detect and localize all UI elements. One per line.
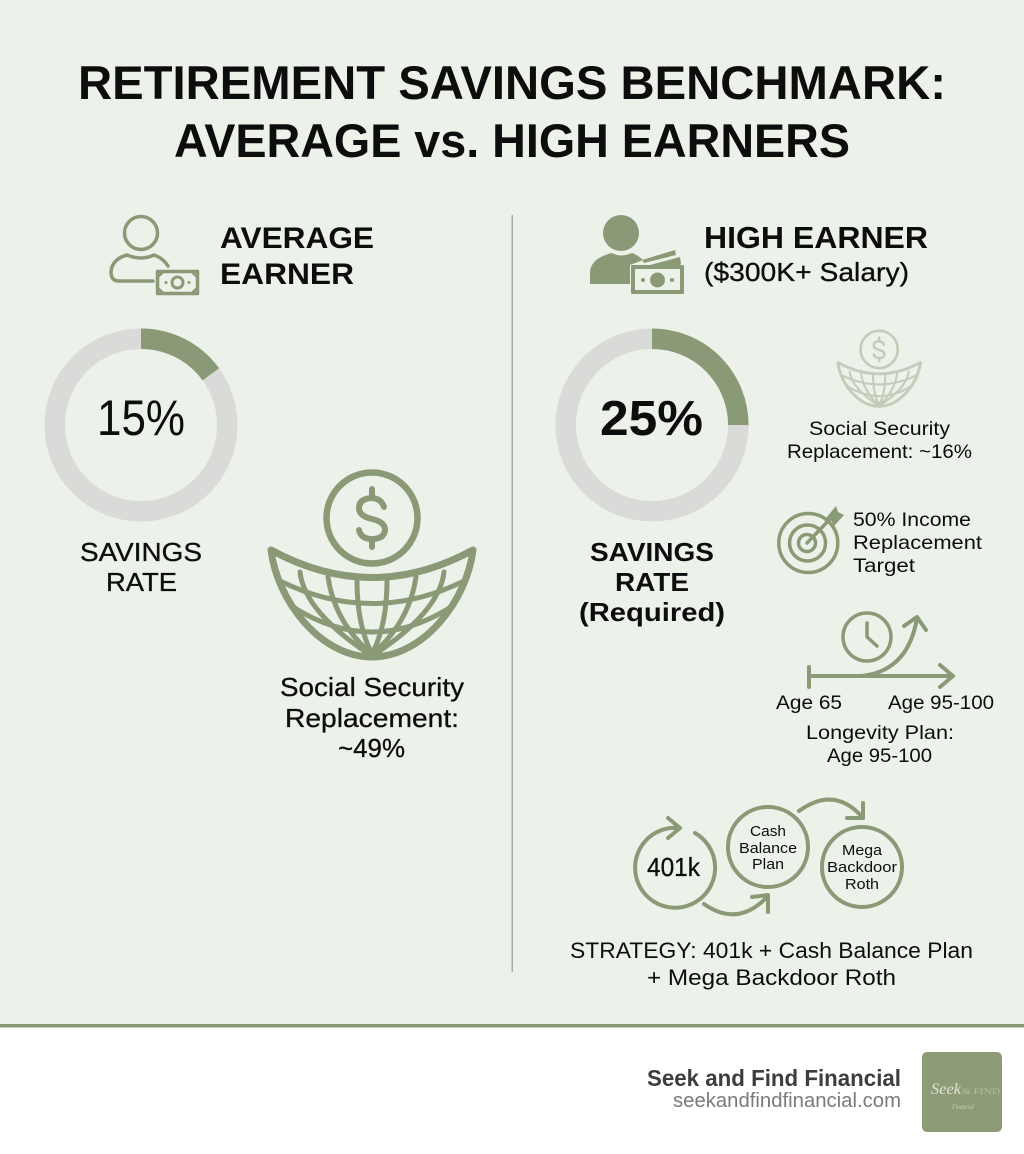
label: savings rate required: (Required) [579,597,725,627]
donut chart: 25% savings rate: 25% [600,392,703,446]
label: income replacement target: 50% Income [853,509,971,531]
label: savings rate: RATE [106,567,177,597]
label: social security replacement 16% [787,418,972,463]
heading: average earner: AVERAGE [220,222,374,255]
panel: average earner [55,216,473,763]
icon: target with arrow [779,506,844,572]
logo [922,1052,1002,1132]
brand name: Seek and Find Financial [647,1065,901,1091]
footer [0,1024,1024,1154]
icon: average earner with banknote [111,216,198,294]
label: social security replacement 16%: Replacement: ~16% [787,441,972,463]
step: cash balance plan: Balance [739,841,797,857]
step: mega backdoor roth: Mega [842,843,883,859]
label: strategy: + Mega Backdoor Roth [647,965,896,990]
label: social security replacement 49%: Replacement: [285,703,459,733]
icon: clock and longevity timeline [809,613,953,687]
label: strategy [570,938,973,990]
divider [512,215,513,972]
icon: faded social security coin and net [838,331,920,406]
donut chart: 25% savings rate [566,339,738,511]
arrow: cash balance plan to mega backdoor roth [799,800,863,818]
donut chart: 15% savings rate: 15% [97,390,185,446]
label: longevity plan [806,722,954,767]
arrow: 401k to cash balance plan [704,895,768,914]
logo: & FIND [962,1087,1000,1096]
step: cash balance plan [728,807,808,887]
icon: high earner with cash [590,215,684,294]
title: AVERAGE vs. HIGH EARNERS [174,114,850,167]
diagram: retirement strategy flow [635,800,902,914]
step: mega backdoor roth [822,827,902,907]
step: mega backdoor roth: Roth [845,877,879,893]
heading: high earner: ($300K+ Salary) [704,257,909,287]
label: age 65 and age 95-100: Age 65 [776,692,842,714]
panel: high earner [566,215,994,990]
step: cash balance plan: Cash [750,824,786,840]
title [78,56,946,167]
title: RETIREMENT SAVINGS BENCHMARK: [78,56,946,109]
label: social security replacement 16%: Social Security [809,418,950,440]
label: social security replacement 49%: Social Security [280,672,464,702]
label: social security replacement 49%: ~49% [338,733,405,763]
label: savings rate required: SAVINGS [590,537,714,567]
label: strategy: STRATEGY: 401k + Cash Balance Plan [570,938,973,963]
icon: social security coin and net [271,472,473,657]
logo: Financial [951,1103,974,1111]
step: cash balance plan: Plan [752,857,784,873]
logo: Seek [931,1081,962,1098]
brand url: seekandfindfinancial.com [673,1090,901,1112]
label: savings rate [80,537,202,597]
donut chart: 15% savings rate [55,339,227,511]
heading: average earner: EARNER [220,258,354,291]
label: income replacement target: Replacement [853,532,983,554]
label: age 65 and age 95-100: Age 95-100 [888,692,994,714]
label: longevity plan: Age 95-100 [827,745,932,767]
label: savings rate: SAVINGS [80,537,202,567]
step: 401k: 401k [647,852,701,882]
label: income replacement target: Target [853,555,916,577]
label: social security replacement 49% [280,672,464,763]
heading: high earner: HIGH EARNER [704,220,928,255]
heading: average earner [220,222,374,291]
label: savings rate required [579,537,725,627]
label: savings rate required: RATE [615,567,689,597]
heading: high earner [704,220,928,287]
label: longevity plan: Longevity Plan: [806,722,954,744]
step: 401k [635,818,715,908]
label: age 65 and age 95-100 [776,692,994,714]
label: income replacement target [853,509,983,577]
step: mega backdoor roth: Backdoor [827,860,897,876]
